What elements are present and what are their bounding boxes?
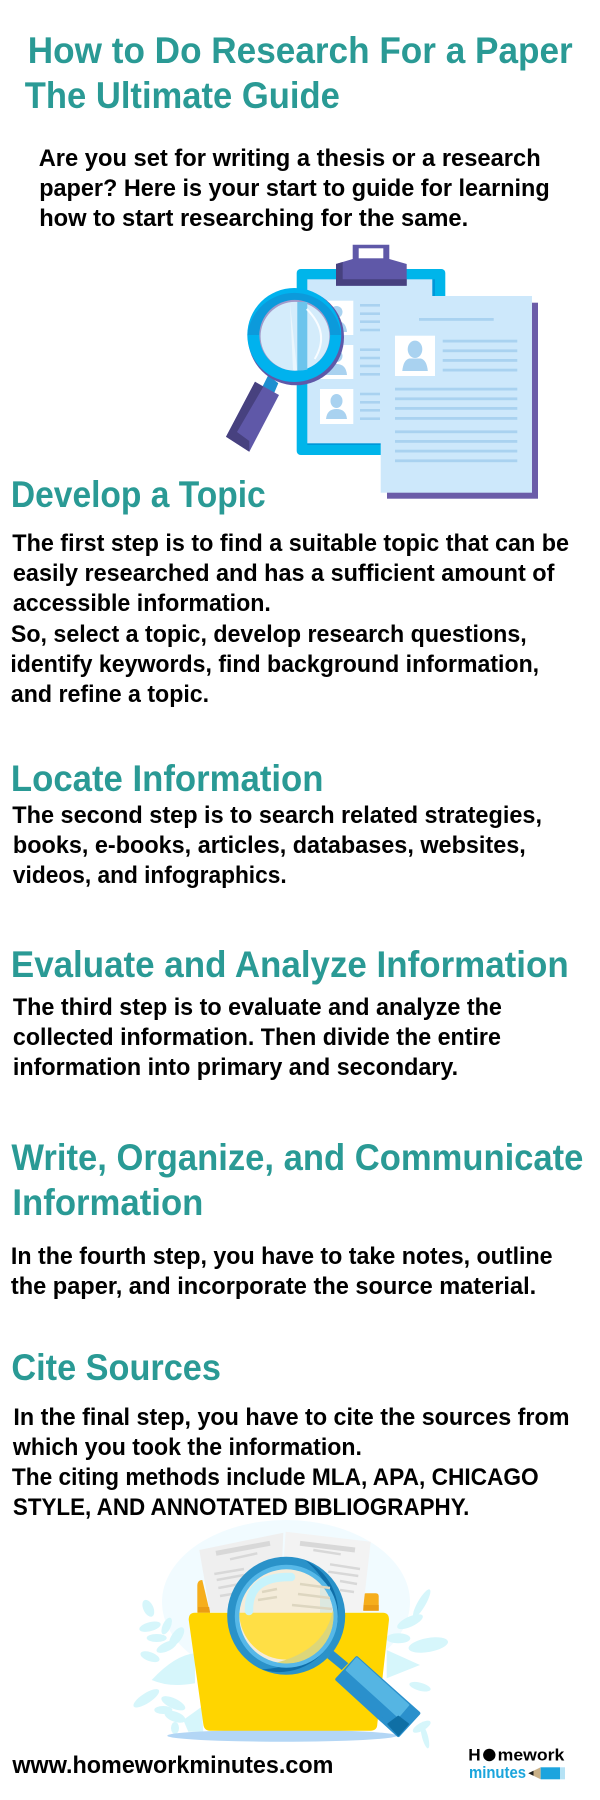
title: How to Do Research For a Paper xyxy=(28,30,573,71)
papers xyxy=(199,1532,371,1612)
heading: evaluate and analyze information: Evaluate and Analyze Information xyxy=(11,944,569,985)
text: evaluate and analyze information: information into primary and secondary. xyxy=(13,1054,458,1081)
logo: homework minutes: mework xyxy=(498,1747,565,1765)
text: write, organize, and communicate xyxy=(11,1243,553,1300)
intro text: how to start researching for the same. xyxy=(39,205,468,232)
title xyxy=(25,30,573,116)
logo: homework minutes: minutes xyxy=(469,1764,526,1782)
intro text: paper? Here is your start to guide for learning xyxy=(39,175,550,202)
text: locate information xyxy=(12,802,542,889)
text: cite sources: In the final step, you have to cite the sources from xyxy=(13,1404,569,1431)
illustration: clipboard, document and magnifier xyxy=(226,245,538,499)
text: develop a topic: accessible information. xyxy=(13,590,271,617)
text: cite sources: The citing methods include MLA, APA, CHICAGO xyxy=(12,1464,539,1491)
text: evaluate and analyze information: collected information. Then divide the entire xyxy=(13,1024,501,1051)
text: cite sources xyxy=(12,1404,569,1521)
background glow and leaves xyxy=(131,1520,449,1749)
logo letter o xyxy=(483,1749,495,1761)
text: evaluate and analyze information: The third step is to evaluate and analyze the xyxy=(13,994,502,1021)
heading: cite sources: Cite Sources xyxy=(11,1347,221,1388)
text: locate information: videos, and infographics. xyxy=(13,862,287,889)
text: locate information: books, e-books, articles, databases, websites, xyxy=(13,832,526,859)
logo: homework minutes: H xyxy=(468,1747,481,1765)
text: write, organize, and communicate: the paper, and incorporate the source material. xyxy=(11,1273,536,1300)
clipboard xyxy=(297,245,445,455)
heading: develop a topic: Develop a Topic xyxy=(11,474,266,515)
text: develop a topic: easily researched and has a sufficient amount of xyxy=(13,560,555,587)
website url: www.homeworkminutes.com xyxy=(11,1752,333,1779)
text: evaluate and analyze information xyxy=(13,994,502,1081)
folder tabs xyxy=(197,1580,379,1613)
title: The Ultimate Guide xyxy=(25,75,340,116)
intro text: Are you set for writing a thesis or a research xyxy=(39,145,541,172)
magnifier xyxy=(226,288,344,452)
text: develop a topic: So, select a topic, develop research questions, xyxy=(11,621,527,648)
illustration: folder and magnifier xyxy=(131,1520,449,1749)
text: develop a topic xyxy=(10,530,569,708)
logo: homework minutes xyxy=(468,1747,565,1782)
shadow xyxy=(167,1730,397,1742)
logo pencil xyxy=(528,1767,565,1779)
intro text xyxy=(39,145,550,232)
text: cite sources: which you took the information. xyxy=(12,1434,362,1461)
folder xyxy=(189,1613,389,1731)
magnifier xyxy=(227,1557,418,1735)
text: develop a topic: The first step is to find a suitable topic that can be xyxy=(12,530,569,557)
text: develop a topic: and refine a topic. xyxy=(11,681,209,708)
text: locate information: The second step is to search related strategies, xyxy=(12,802,542,829)
heading: write, organize, and communicate information xyxy=(11,1137,583,1223)
text: develop a topic: identify keywords, find background information, xyxy=(10,651,539,678)
heading: locate information: Locate Information xyxy=(11,758,324,799)
document xyxy=(381,296,538,499)
heading: write, organize, and communicate information: Information xyxy=(12,1182,203,1223)
text: cite sources: STYLE, AND ANNOTATED BIBLIOGRAPHY. xyxy=(13,1494,469,1521)
text: write, organize, and communicate: In the fourth step, you have to take notes, outline xyxy=(11,1243,553,1270)
